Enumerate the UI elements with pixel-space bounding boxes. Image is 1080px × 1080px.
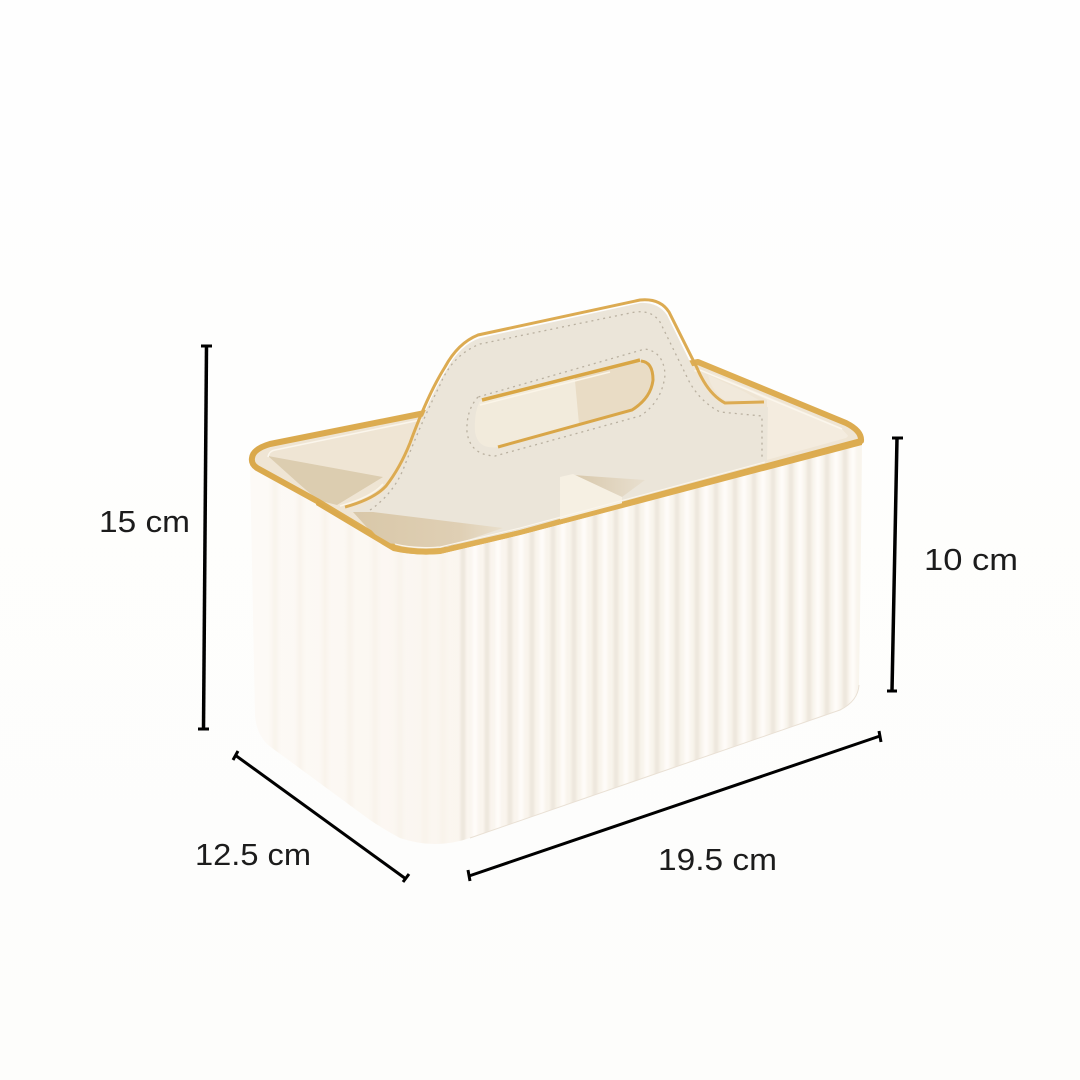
handle panel [349,303,768,548]
handle [316,300,862,555]
dimension: depth 12.5 cm [195,751,409,882]
product: caddy organizer [250,300,862,860]
front rim overlay [316,440,862,555]
interior floor and walls [252,363,860,552]
dimension: width 19.5 cm [468,731,881,881]
front left shadow repeated over panel foot [356,512,503,547]
dimension: height 15 cm: 15 cm [99,504,190,539]
dimension: height 10 cm: 10 cm [924,542,1018,577]
dimension: height 15 cm [99,346,212,729]
shadow left [268,456,383,505]
dimension: depth 12.5 cm: 12.5 cm [195,837,311,872]
stitching [370,312,762,510]
handle gold outline [345,300,764,507]
dimension: width 19.5 cm: 19.5 cm [658,842,777,877]
rim [252,362,861,552]
box body [269,445,862,844]
shadow on floor beside divider [573,475,645,497]
rear wall [708,375,762,402]
hole gold trim [498,361,653,447]
dimension: height 10 cm [887,438,1018,691]
divider [560,474,622,521]
shadow front [353,512,437,547]
right compartment [711,372,848,460]
rim and interior [252,362,861,552]
hole [475,360,653,447]
